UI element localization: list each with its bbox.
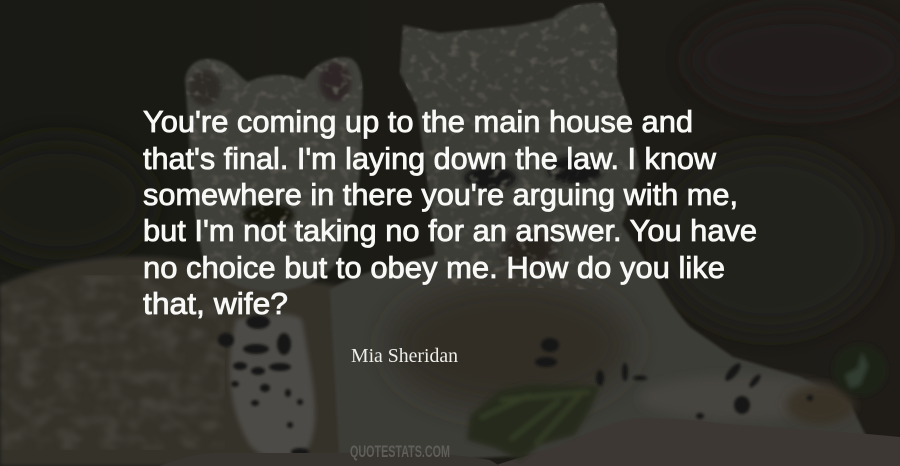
author name: Mia Sheridan: [351, 345, 458, 367]
quote text: but I'm not taking no for an answer. You have: [143, 213, 757, 248]
quote text: You're coming up to the main house and: [143, 104, 693, 139]
foliage right: [833, 344, 887, 396]
quote text: that's final. I'm laying down the law. I know: [143, 141, 717, 176]
quote text: [143, 104, 757, 321]
snow leopard cub: [0, 57, 363, 466]
snow leopard adult: [330, 3, 866, 466]
leopard spots: [218, 315, 813, 456]
quote text: no choice but to obey me. How do you like: [143, 250, 725, 285]
body mottling: [0, 275, 225, 450]
watermark: QUOTESTATS.COM: [350, 442, 450, 461]
quote text: that, wife?: [143, 286, 288, 321]
fur mottling: [186, 3, 640, 290]
quote text: somewhere in there you're arguing with me,: [143, 177, 738, 212]
foreground rock: [160, 418, 900, 466]
foliage left: [467, 384, 600, 460]
cub front paw: [230, 314, 315, 458]
